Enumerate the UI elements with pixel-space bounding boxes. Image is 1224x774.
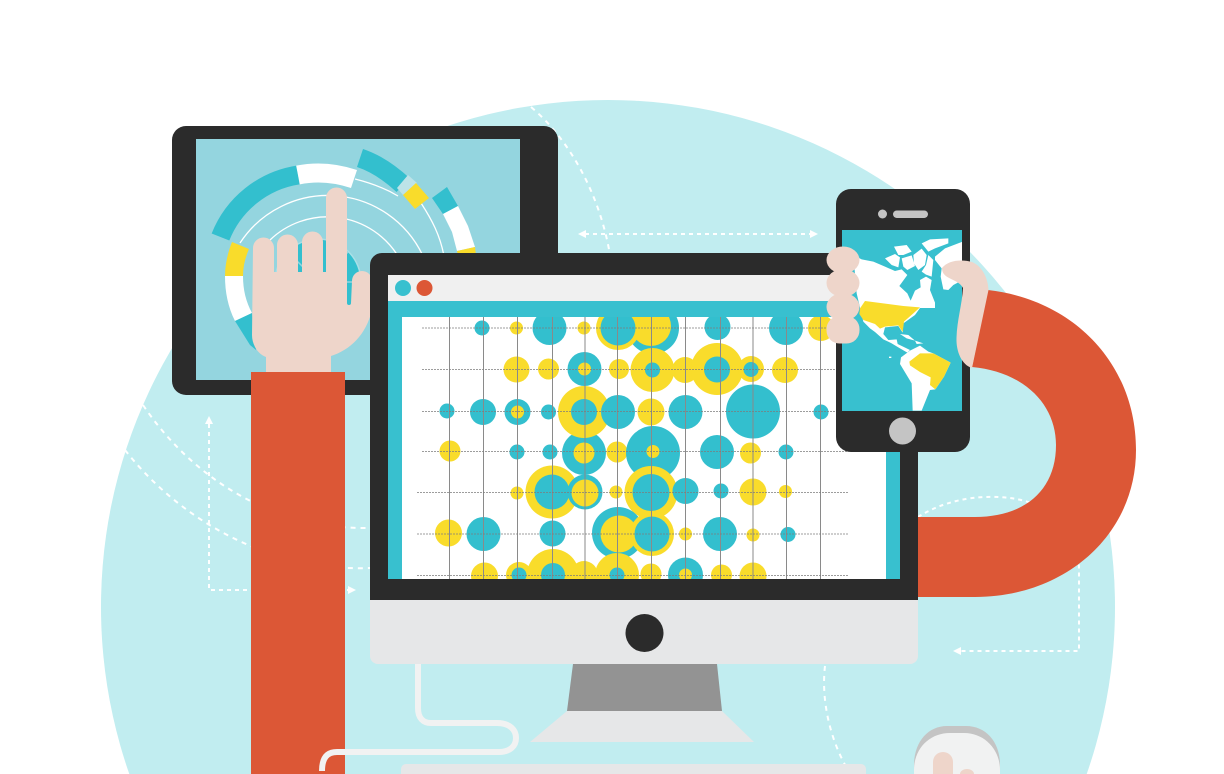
red arm curve — [910, 290, 1136, 597]
browser window — [388, 275, 900, 579]
phone screen — [842, 230, 962, 411]
Greenland — [935, 242, 963, 290]
row 4 — [440, 426, 794, 474]
fingers holding phone — [826, 246, 860, 344]
Caribbean islands — [889, 334, 923, 358]
radial chart — [220, 158, 476, 350]
row 3 — [440, 384, 828, 475]
bubble chart — [417, 317, 848, 579]
smartphone — [836, 189, 970, 452]
monitor button — [626, 614, 664, 652]
phone home button — [889, 418, 916, 444]
row 6 — [435, 507, 796, 559]
phone speaker — [878, 210, 928, 218]
monitor — [370, 253, 918, 664]
cable — [322, 660, 516, 771]
dashed flow lines — [125, 107, 1079, 770]
browser buttons — [395, 280, 432, 296]
row 1 — [474, 317, 831, 352]
North America land — [853, 255, 935, 353]
row 2 — [504, 343, 798, 395]
mouse fingers — [933, 752, 974, 774]
highlighted USA — [859, 301, 920, 332]
map of the Americas — [853, 238, 963, 411]
keyboard — [401, 764, 866, 774]
pointing hand — [252, 188, 372, 373]
red sleeve — [251, 372, 345, 774]
tablet — [172, 126, 558, 395]
grid lines — [417, 317, 848, 579]
mouse — [914, 726, 1000, 774]
monitor stand — [530, 664, 754, 742]
monitor chin — [370, 600, 918, 664]
highlighted Brazil — [909, 353, 951, 389]
monitor bezel — [370, 253, 918, 600]
Arctic islands — [885, 238, 948, 277]
row 7 — [471, 549, 766, 579]
thumb holding phone — [942, 260, 988, 368]
tablet screen — [196, 139, 520, 380]
South America land — [900, 346, 951, 411]
row 5 — [510, 466, 792, 519]
background circle — [101, 100, 1115, 774]
phone body — [836, 189, 970, 452]
tablet body — [172, 126, 558, 395]
